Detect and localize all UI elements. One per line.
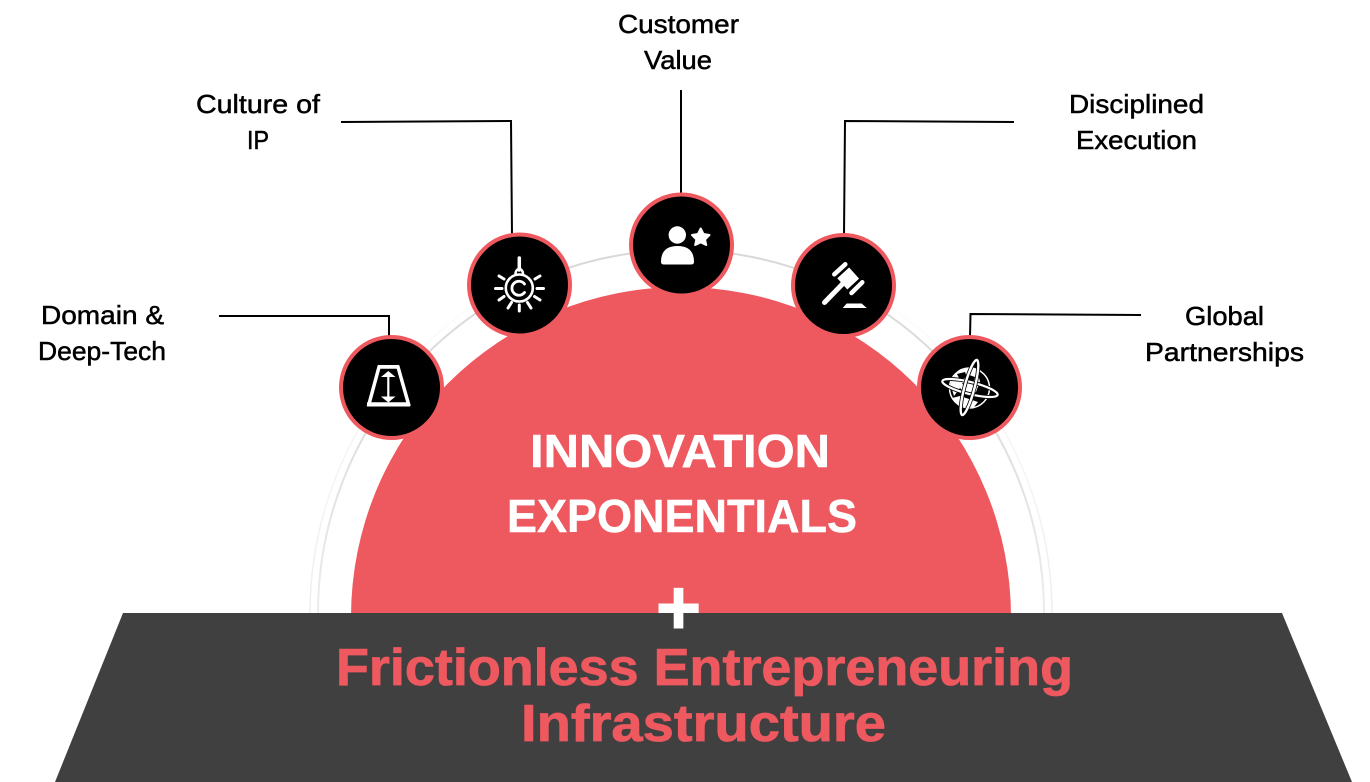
icon: domain and deep-tech trapezoid: [341, 337, 442, 438]
label: customer value: Customer: [618, 9, 739, 39]
connector: culture of ip: [341, 121, 512, 235]
connector: domain and deep-tech: [219, 316, 389, 337]
label: domain and deep-tech: Deep-Tech: [38, 336, 166, 366]
semicircle: innovation exponentials: [351, 287, 1011, 617]
heading: innovation exponentials: EXPONENTIALS: [507, 490, 857, 542]
heading: frictionless entrepreneuring infrastructure: [336, 639, 1073, 753]
label: domain and deep-tech: [38, 300, 166, 366]
label: disciplined execution: Execution: [1076, 125, 1197, 155]
heading: innovation exponentials: [507, 425, 857, 542]
connector: global partnerships: [970, 314, 1141, 337]
label: customer value: [618, 9, 739, 75]
icon: globe with orbits: [919, 337, 1020, 438]
heading: frictionless entrepreneuring infrastructure: Frictionless Entrepreneuring: [336, 639, 1073, 697]
icon: gavel: [793, 235, 894, 336]
icon: customer with star: [631, 194, 732, 296]
label: domain and deep-tech: Domain &: [41, 300, 164, 330]
label: disciplined execution: [1069, 89, 1204, 155]
label: global partnerships: Global: [1185, 301, 1264, 331]
label: global partnerships: [1145, 301, 1304, 367]
connector: customer value: [680, 90, 682, 195]
label: culture of ip: [196, 89, 321, 155]
label: disciplined execution: Disciplined: [1069, 89, 1204, 119]
connector: disciplined execution: [844, 121, 1014, 235]
heading: innovation exponentials: INNOVATION: [530, 425, 830, 477]
label: culture of ip: Culture of: [196, 89, 321, 119]
icon: copyright light bulb: [469, 234, 570, 336]
label: global partnerships: Partnerships: [1145, 337, 1304, 367]
label: culture of ip: IP: [247, 125, 269, 155]
plus sign: +: [656, 563, 701, 651]
label: customer value: Value: [644, 45, 712, 75]
heading: frictionless entrepreneuring infrastructure: Infrastructure: [521, 695, 886, 753]
base trapezoid: infrastructure platform: [55, 613, 1352, 782]
